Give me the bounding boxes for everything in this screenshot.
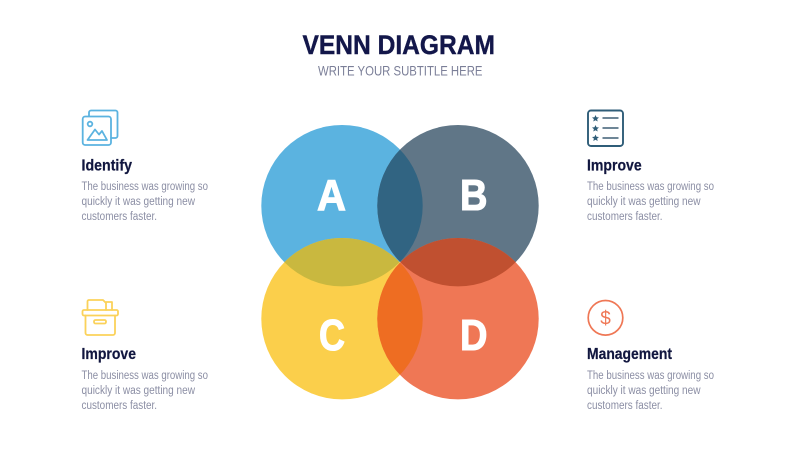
- text block: customers faster.: [587, 400, 662, 412]
- text block: customers faster.: [587, 211, 662, 223]
- text block: [82, 370, 208, 412]
- text block: The business was growing so: [587, 370, 714, 382]
- heading: Improve: [587, 158, 642, 175]
- letter A: A: [317, 172, 346, 220]
- letter B: B: [460, 172, 488, 220]
- text block: customers faster.: [82, 211, 157, 223]
- panel: identify: [82, 110, 208, 223]
- overlap A and C: [284, 238, 400, 286]
- text block: [587, 370, 714, 412]
- icon: archive box: [82, 300, 118, 335]
- icon: star list: [588, 110, 623, 146]
- text block: The business was growing so: [82, 181, 208, 193]
- overlap A and B: [377, 150, 423, 262]
- heading: Improve: [82, 346, 136, 363]
- panel: management: [587, 300, 714, 412]
- text block: quickly it was getting new: [82, 385, 196, 397]
- text block: quickly it was getting new: [587, 385, 701, 397]
- letter C: C: [319, 312, 345, 360]
- circle D: [377, 238, 539, 399]
- icon: dollar coin: $: [600, 308, 611, 330]
- text block: customers faster.: [82, 400, 157, 412]
- circle B: [377, 125, 539, 286]
- text block: The business was growing so: [587, 181, 714, 193]
- panel: improve left: [82, 300, 208, 412]
- letter D: D: [460, 312, 488, 360]
- overlap C and D: [377, 262, 423, 375]
- text block: quickly it was getting new: [82, 196, 196, 208]
- text block: quickly it was getting new: [587, 196, 701, 208]
- venn diagram: [261, 125, 539, 399]
- icon: images: [83, 110, 118, 145]
- text block: [587, 181, 714, 223]
- circle C: [261, 238, 423, 399]
- panel: improve right: [587, 110, 714, 223]
- overlap B and D: [400, 238, 516, 286]
- heading: Identify: [82, 158, 132, 175]
- circle A: [261, 125, 423, 286]
- title: VENN DIAGRAM: [302, 30, 495, 60]
- heading: Management: [587, 346, 672, 363]
- subtitle: WRITE YOUR SUBTITLE HERE: [318, 62, 482, 78]
- text block: [82, 181, 208, 223]
- text block: The business was growing so: [82, 370, 208, 382]
